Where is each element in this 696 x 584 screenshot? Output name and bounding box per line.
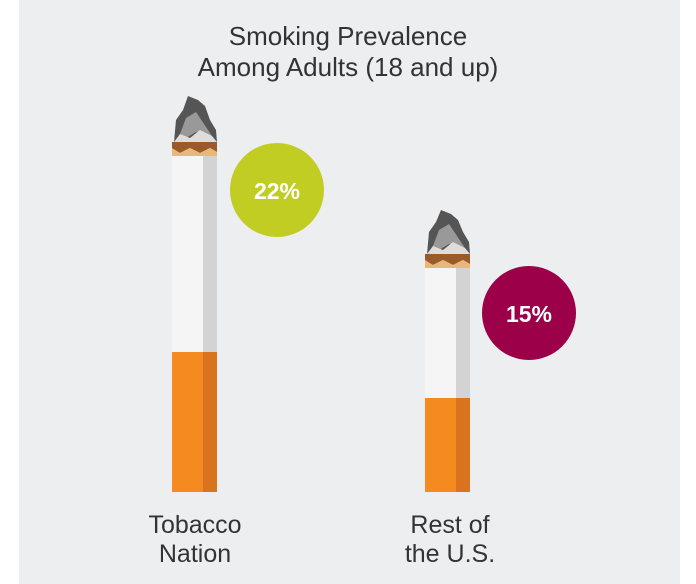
title: Smoking Prevalence — [229, 21, 467, 51]
label: Tobacco Nation: Tobacco — [148, 511, 242, 539]
label: Rest of the U.S. — [405, 511, 495, 568]
badge: 22% — [230, 143, 324, 237]
badge: 15% — [482, 266, 576, 360]
label: Tobacco Nation — [148, 511, 242, 568]
label: Rest of the U.S.: the U.S. — [405, 540, 495, 568]
title: Among Adults (18 and up) — [198, 52, 498, 82]
badge: 15%: 15% — [506, 301, 552, 327]
badge: 22%: 22% — [254, 178, 300, 204]
label: Tobacco Nation: Nation — [159, 540, 231, 568]
cigarette: Rest of the U.S. — [425, 210, 470, 492]
title — [198, 21, 498, 82]
cigarette: Tobacco Nation — [172, 96, 217, 492]
label: Rest of the U.S.: Rest of — [410, 511, 490, 539]
